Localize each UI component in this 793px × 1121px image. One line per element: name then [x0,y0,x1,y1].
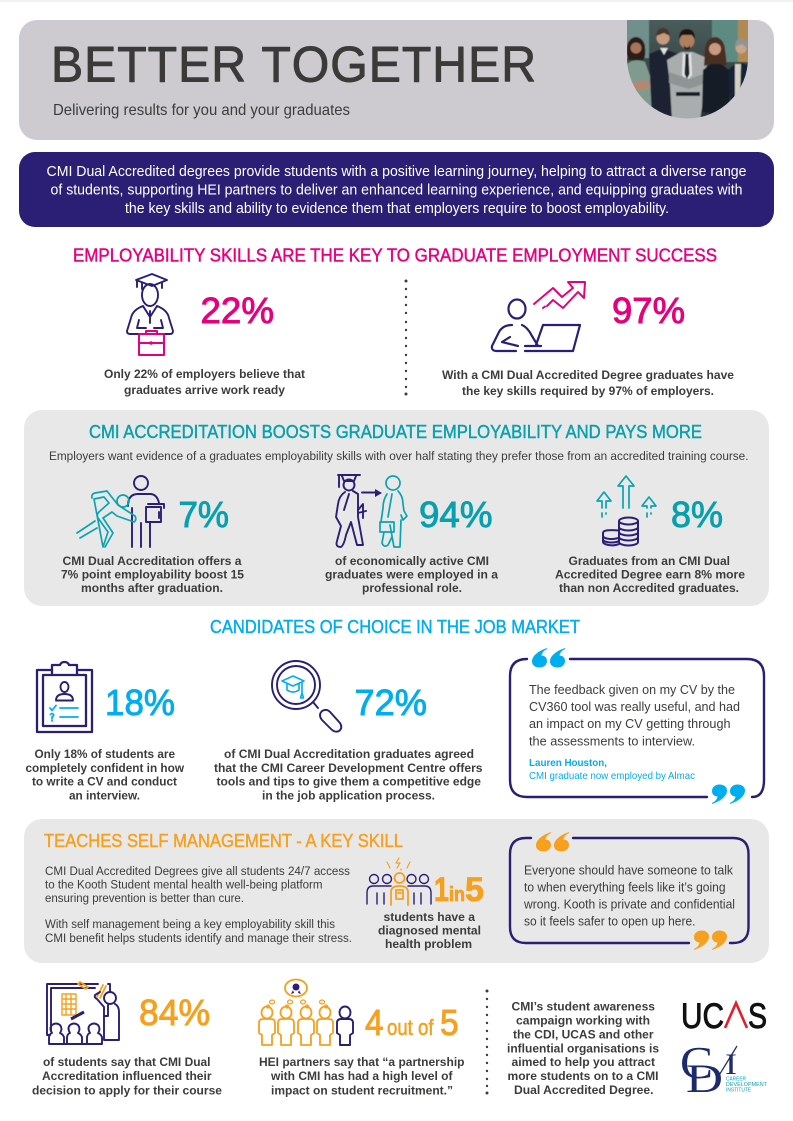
heading: employability skills: EMPLOYABILITY SKILLS ARE THE KEY TO GRADUATE EMPLOYMENT SUCCESS [73,244,717,266]
icon: person at laptop with rising arrow [492,282,585,351]
text: work ready: graduates arrive work ready [124,383,285,397]
icon: graduate with briefcase [127,274,173,355]
callout: student quote on CV360: an impact on my CV getting through [529,716,730,731]
callout: Kooth quote: to when everything feels like it’s going [524,880,726,894]
text: CV confidence: Only 18% of students are [34,747,175,761]
callout: student quote on CV360: CMI graduate now employed by Almac [529,770,695,782]
title: BETTER TOGETHER [51,36,537,92]
heading: teaches self management: TEACHES SELF MANAGEMENT - A KEY SKILL [44,830,403,851]
text: earn more: than non Accredited graduates. [559,581,739,595]
icon: teacher at whiteboard with students [47,982,119,1044]
callout: Kooth quote [510,832,748,950]
icon: closing quote mark [712,784,745,804]
text: key skills: With a CMI Dual Accredited Degree graduates have [442,368,734,382]
heading: candidates of choice: CANDIDATES OF CHOICE IN THE JOB MARKET [210,616,580,637]
stat: 1 in 5: 1 [434,871,449,909]
callout: Kooth quote: wrong. Kooth is private and confidential [523,896,735,912]
logo: Career Development Institute: D [686,1056,723,1101]
logo: Career Development Institute: CAREER [726,1076,746,1082]
text: economically active [325,554,498,595]
text: CV confidence [26,747,184,802]
logo: UCAS [681,997,767,1036]
stat: 22%: 22% [200,290,274,331]
text: influenced decision: of students say that CMI Dual [43,1055,210,1069]
text: career development centre: of CMI Dual Accreditation graduates agreed [224,747,474,761]
icon: opening quote mark [532,648,565,668]
text: career development centre [214,747,483,802]
text: career development centre: tools and tips to give them a competitive edge [216,774,481,788]
text: student awareness campaign: Dual Accredited Degree. [514,1083,654,1097]
text: CV confidence: completely confident in how [26,761,184,775]
stat: 1 in 5: 5 [465,871,484,909]
icon: rosette and five people [259,980,353,1045]
text: influenced decision [32,1055,222,1098]
text: economically active: of economically active CMI [335,554,489,568]
text: Kooth platform [45,864,352,945]
stat: 94%: 94% [419,494,492,535]
icon: runner and person with clipboard [77,476,164,547]
logo: Career Development Institute: DEVELOPMENT [726,1082,768,1088]
stat: 84%: 84% [139,992,210,1033]
callout: Kooth quote: so it feels safer to open up here. [524,914,696,928]
text: student awareness campaign [507,1000,659,1097]
text: economically active: graduates were employed in a [325,568,498,582]
text: career development centre: that the CMI Career Development Centre offers [214,761,483,775]
stat: 1 in 5 [434,871,484,909]
stat: 4 out of 5: 5 [440,1002,459,1043]
text: student awareness campaign: aimed to help you attract [512,1055,655,1069]
text: earn more: Accredited Degree earn 8% more [555,568,745,582]
panel: intro banner [19,152,774,227]
divider: dotted vertical [404,280,408,396]
logo: Career Development Institute: INSTITUTE [726,1088,751,1094]
text: influenced decision: decision to apply for their course [32,1084,222,1098]
text: diagnosed mental health [378,910,481,951]
text: HEI partners [259,1055,465,1098]
text: Kooth platform: to the Kooth Student mental health well-being platform [45,878,322,892]
subtitle: Delivering results for you and your graduates [53,102,350,119]
text: Kooth platform: With self management being a key employability skill this [45,917,335,931]
text: employability boost: months after graduation. [81,581,223,595]
text: work ready [104,367,305,397]
callout: student quote on CV360: The feedback given on my CV by the [529,682,735,697]
icon: coins with rising arrows [597,476,656,546]
text: employability boost: CMI Dual Accreditation offers a [62,554,242,568]
text: HEI partners: impact on student recruitment.” [271,1084,453,1098]
stat: 4 out of 5: 4 [365,1002,384,1043]
text: economically active: professional role. [362,581,462,595]
stat: 1 in 5: in [449,884,465,906]
text: key skills [442,368,734,398]
logo: Career Development Institute [680,1037,768,1101]
text: work ready: Only 22% of employers believe that [104,367,305,381]
text: Kooth platform: CMI Dual Accredited Degrees give all students 24/7 access [45,864,350,878]
callout: student quote on CV360: CV360 tool was really useful, and had [529,699,740,714]
panel: intro banner: of students, supporting HEI partners to deliver an enhanced learning experience, and equipping graduates with [50,182,743,198]
logo: Career Development Institute: C [680,1037,713,1088]
icon: closing quote mark [694,930,727,950]
text: employers want evidence: Employers want evidence of a graduates employability skills with over half stating they prefer those from an accredited training course. [49,449,748,463]
photo: business team [625,18,750,122]
text: student awareness campaign: CMI’s student awareness [512,1000,655,1014]
callout: student quote on CV360 [510,648,764,804]
text: student awareness campaign: more students on to a CMI [508,1069,658,1083]
text: employability boost [61,554,244,595]
divider: dotted vertical bottom [486,990,488,1094]
stat: 4 out of 5 [365,1002,459,1043]
text: CV confidence: to write a CV and conduct [32,774,177,788]
text: Kooth platform: ensuring prevention is better than cure. [45,891,244,905]
text: employability boost: 7% point employability boost 15 [61,568,244,582]
text: student awareness campaign: the CDI, UCAS and other [513,1028,654,1042]
stat: 18%: 18% [105,682,175,723]
stat: 7%: 7% [178,494,229,535]
text: influenced decision: Accreditation influenced their [42,1069,212,1083]
callout: student quote on CV360: Lauren Houston, [529,757,607,769]
text: diagnosed mental health: diagnosed mental [378,924,481,938]
text: student awareness campaign: campaign working with [516,1014,650,1028]
panel: CMI accreditation [24,410,769,606]
text: earn more: Graduates from an CMI Dual [568,554,730,568]
icon: magnifier with graduation cap [272,661,341,732]
stat: 4 out of 5: out of [387,1015,434,1040]
text: diagnosed mental health: students have a [384,910,475,924]
text: earn more [555,554,745,595]
text: student awareness campaign: influential organisations is [507,1042,659,1056]
text: diagnosed mental health: health problem [385,937,472,951]
icon: opening quote mark [536,832,569,852]
stat: 72%: 72% [354,682,427,723]
text: CV confidence: an interview. [69,788,140,802]
icon: graduate walking to employed person [336,475,407,547]
text: career development centre: in the job application process. [262,788,435,802]
stat: 97%: 97% [612,290,685,331]
text: key skills: the key skills required by 97% of employers. [462,384,714,398]
text: HEI partners: HEI partners say that “a partnership [259,1055,465,1069]
panel: intro banner: CMI Dual Accredited degrees provide students with a positive learning journey, helping to attract a diverse range [46,164,747,180]
logo: UCAS: S [748,997,767,1036]
callout: student quote on CV360: the assessments to interview. [529,734,695,748]
icon: five people, one highlighted [367,858,431,905]
panel: self management [24,819,769,963]
heading: accreditation boosts employability: CMI ACCREDITATION BOOSTS GRADUATE EMPLOYABILITY AND PAYS MORE [89,421,702,442]
callout: Kooth quote: Everyone should have someone to talk [524,862,733,878]
text: Kooth platform: CMI benefit helps students identify and manage their stress. [45,931,352,945]
icon: CV clipboard [37,662,92,732]
logo: Career Development Institute: I [725,1048,737,1081]
text: HEI partners: with CMI has had a high level of [270,1069,453,1083]
panel: header [19,18,774,140]
panel: intro banner: the key skills and ability to evidence them that employers require to boost employability. [125,201,669,217]
logo: UCAS: UC [681,997,724,1036]
stat: 8%: 8% [671,494,723,535]
